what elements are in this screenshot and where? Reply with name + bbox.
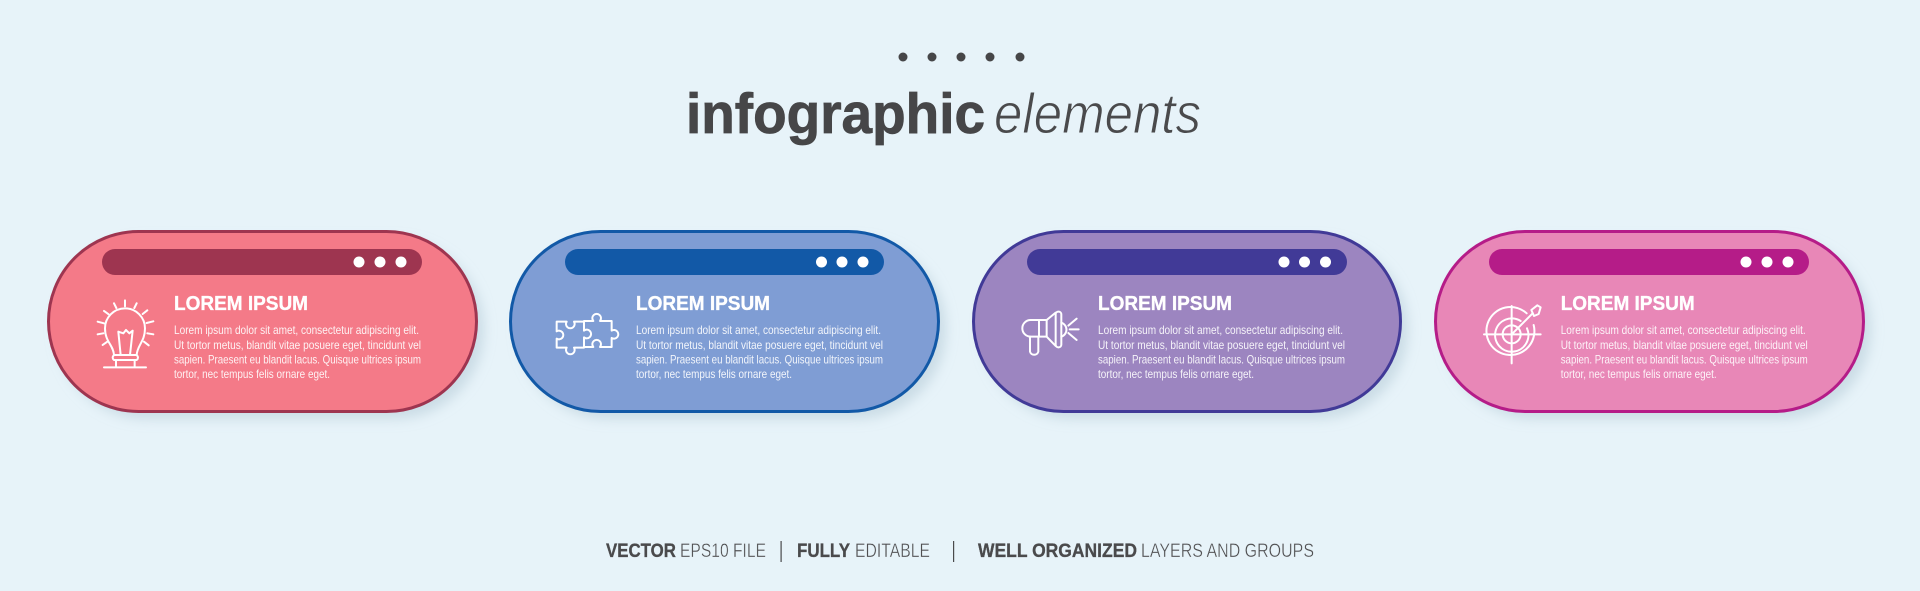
body text: Ut tortor metus, blandit vitae posuere eget, tincidunt vel	[174, 339, 421, 352]
card shape	[510, 232, 938, 412]
icon: light bulb	[98, 300, 153, 367]
body text: tortor, nec tempus felis ornare eget.	[1098, 368, 1254, 381]
header dots	[816, 256, 868, 268]
heading: LOREM IPSUM	[174, 292, 308, 315]
body text: sapien. Praesent eu blandit lacus. Quisque ultrices ipsum	[1561, 354, 1808, 366]
header bar	[1489, 249, 1809, 275]
header dots	[1278, 256, 1331, 268]
header dots	[354, 256, 406, 268]
header bar	[565, 249, 884, 275]
body text: Ut tortor metus, blandit vitae posuere eget, tincidunt vel	[1098, 339, 1345, 352]
body text	[636, 324, 883, 381]
footer line: FULLY	[797, 541, 850, 562]
header dots	[1740, 256, 1794, 268]
body text	[174, 324, 421, 381]
footer line: LAYERS AND GROUPS	[1141, 541, 1314, 562]
body text: Lorem ipsum dolor sit amet, consectetur adipiscing elit.	[1098, 324, 1343, 337]
header bar	[1027, 249, 1347, 275]
card shape	[974, 232, 1400, 412]
footer line	[606, 541, 1314, 562]
icon: target with arrow	[1484, 305, 1541, 363]
body text: sapien. Praesent eu blandit lacus. Quisque ultrices ipsum	[1098, 354, 1345, 366]
heading: LOREM IPSUM	[1561, 292, 1695, 315]
body text: Ut tortor metus, blandit vitae posuere eget, tincidunt vel	[1561, 339, 1808, 352]
body text: tortor, nec tempus felis ornare eget.	[636, 368, 792, 381]
body text: sapien. Praesent eu blandit lacus. Quisque ultrices ipsum	[174, 354, 421, 366]
panel: magenta card	[1436, 232, 1871, 419]
title	[686, 82, 1201, 146]
panel: purple card	[974, 232, 1408, 419]
footer line: WELL ORGANIZED	[978, 541, 1137, 562]
footer line: EDITABLE	[855, 541, 930, 562]
icon: megaphone	[1022, 312, 1079, 355]
title: infographic	[686, 82, 985, 146]
body text	[1561, 324, 1808, 381]
heading: LOREM IPSUM	[636, 292, 770, 315]
card shape	[1436, 232, 1864, 412]
body text	[1098, 324, 1345, 381]
panel: blue card	[510, 232, 946, 419]
footer line: VECTOR	[606, 541, 676, 562]
body text: Ut tortor metus, blandit vitae posuere eget, tincidunt vel	[636, 339, 883, 352]
body text: Lorem ipsum dolor sit amet, consectetur adipiscing elit.	[1561, 324, 1806, 337]
header bar	[102, 249, 422, 275]
body text: tortor, nec tempus felis ornare eget.	[174, 368, 330, 381]
body text: tortor, nec tempus felis ornare eget.	[1561, 368, 1717, 381]
panel: red card	[48, 232, 484, 419]
heading: LOREM IPSUM	[1098, 292, 1232, 315]
body text: Lorem ipsum dolor sit amet, consectetur adipiscing elit.	[174, 324, 419, 337]
footer line: EPS10 FILE	[680, 541, 766, 562]
icon: puzzle pieces	[557, 314, 618, 354]
body text: Lorem ipsum dolor sit amet, consectetur adipiscing elit.	[636, 324, 881, 337]
card shape	[48, 232, 476, 412]
title dots	[898, 52, 1024, 62]
body text: sapien. Praesent eu blandit lacus. Quisque ultrices ipsum	[636, 354, 883, 366]
title: elements	[994, 82, 1201, 146]
